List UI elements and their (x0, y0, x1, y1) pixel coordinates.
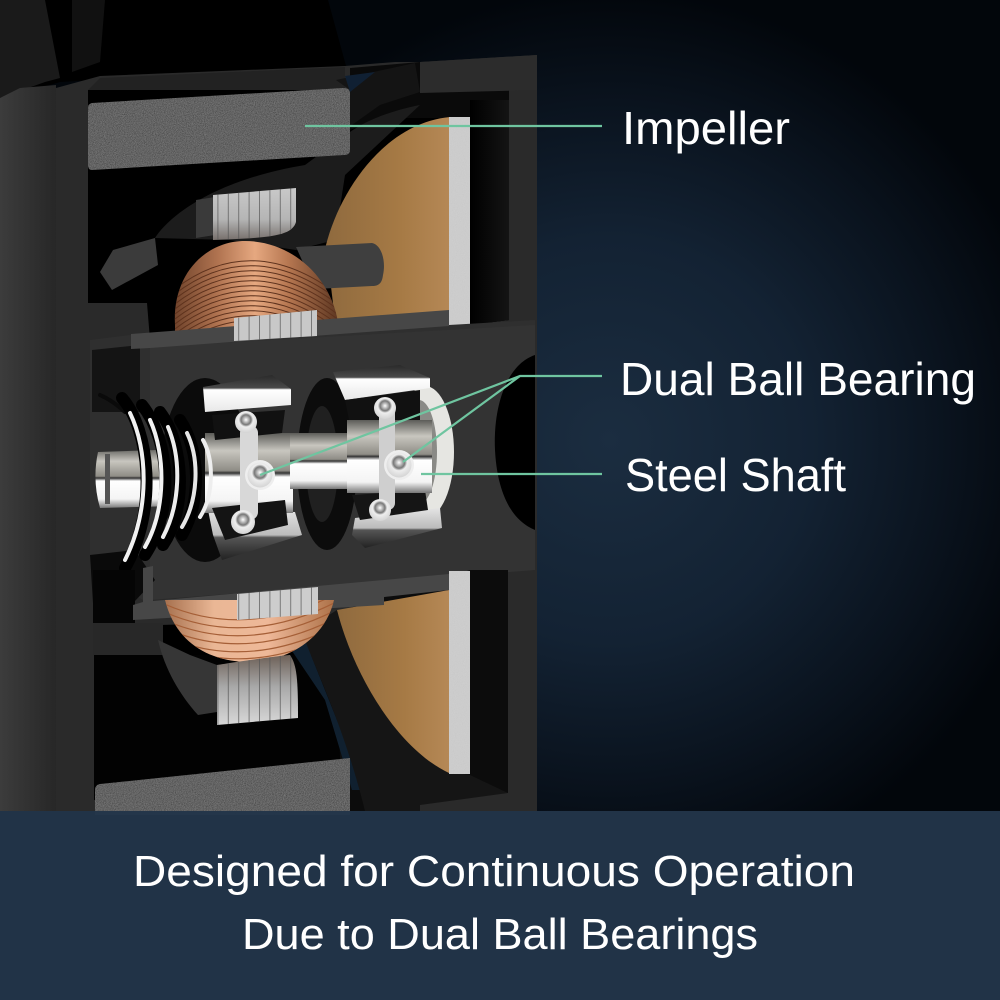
impeller block (top) (88, 88, 350, 170)
banner headline line 2: Due to Dual Ball Bearings (242, 910, 758, 959)
fan blades at top (0, 0, 346, 100)
pins on bottom plate (237, 587, 318, 620)
copper pins (bottom) (217, 655, 298, 725)
bottom chamber cavity (93, 570, 537, 811)
white strip (bottom) (449, 571, 470, 774)
bracket block (bottom) (158, 640, 217, 715)
right bearing (290, 365, 454, 550)
plate under top coil (131, 310, 449, 349)
copper pins (top) (213, 188, 296, 240)
banner headline line 1: Designed for Continuous Operation (133, 847, 855, 896)
lower pins on plate (top) (234, 310, 317, 341)
label: Steel Shaft: Steel Shaft (625, 449, 846, 501)
white strip (top) (449, 117, 470, 325)
tan cone (bottom) (337, 590, 449, 773)
steel shaft leader line (421, 473, 602, 475)
dark fan hub arc behind coil (155, 105, 420, 250)
top chamber: cavity (88, 55, 537, 340)
tan cone (top) (326, 117, 450, 320)
left bearing balls (231, 411, 275, 534)
mid chamber (90, 320, 535, 603)
copper coil (top) (174, 241, 338, 331)
shaft peg (top) (296, 243, 384, 289)
label: Impeller: Impeller (622, 102, 790, 154)
spring (100, 395, 211, 568)
right bearing balls (369, 397, 414, 521)
steel shaft (95, 433, 350, 508)
impeller block (bottom) (95, 758, 350, 815)
impeller leader line (305, 125, 602, 127)
bracket block (top) (100, 197, 215, 290)
bottom banner (0, 811, 1000, 1000)
label: Dual Ball Bearing: Dual Ball Bearing (620, 353, 976, 405)
fan frame housing (0, 55, 537, 811)
copper coil (bottom) (165, 600, 334, 662)
dual ball bearing leader lines (260, 376, 602, 475)
bottom plate (133, 566, 449, 620)
left bearing (161, 375, 302, 562)
